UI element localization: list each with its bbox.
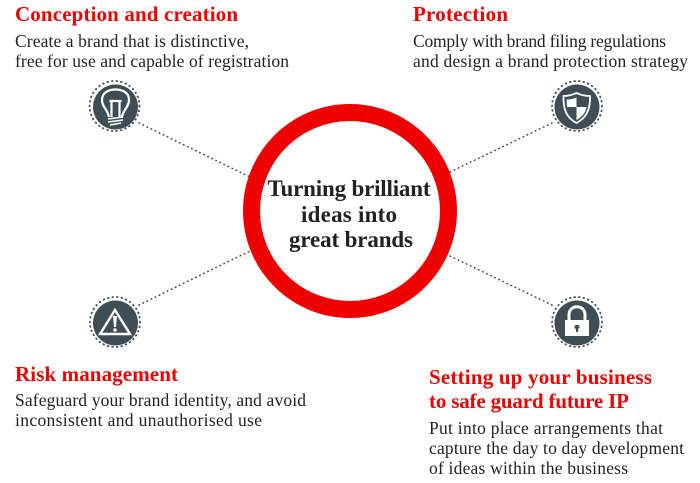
central text: ideas into	[301, 202, 397, 227]
heading: to safe guard future IP	[429, 389, 629, 413]
heading: Risk management	[15, 362, 178, 386]
heading	[429, 365, 652, 413]
description: of ideas within the business	[429, 458, 628, 478]
connector: bottom left	[139, 251, 250, 305]
panel: risk management	[15, 362, 306, 430]
heading: Protection	[413, 2, 508, 26]
description	[429, 418, 684, 478]
description	[15, 390, 306, 430]
connector: top left	[139, 123, 250, 177]
description	[15, 31, 289, 71]
icon: light bulb	[90, 81, 140, 131]
description: Put into place arrangements that	[429, 418, 663, 438]
description: Create a brand that is distinctive,	[15, 31, 249, 51]
description: and design a brand protection strategy	[413, 51, 688, 71]
panel: setting up your business	[429, 365, 684, 478]
central text: Turning brilliant	[268, 176, 431, 201]
icon: warning triangle	[90, 297, 140, 347]
description: capture the day to day development	[429, 438, 684, 458]
central red ring	[252, 112, 448, 310]
icon: padlock	[552, 297, 602, 347]
central text	[268, 176, 431, 252]
panel: protection	[413, 2, 688, 71]
icon: shield	[552, 81, 602, 131]
description: Comply with brand filing regulations	[413, 31, 666, 51]
connector: top right	[450, 123, 552, 172]
description: inconsistent and unauthorised use	[15, 410, 262, 430]
panel: conception and creation	[15, 2, 289, 71]
central text: great brands	[289, 227, 413, 252]
heading: Setting up your business	[429, 365, 652, 389]
description: free for use and capable of registration	[15, 51, 289, 71]
heading: Conception and creation	[15, 2, 238, 26]
connector: bottom right	[450, 256, 552, 305]
description: Safeguard your brand identity, and avoid	[15, 390, 306, 410]
description	[413, 31, 688, 71]
